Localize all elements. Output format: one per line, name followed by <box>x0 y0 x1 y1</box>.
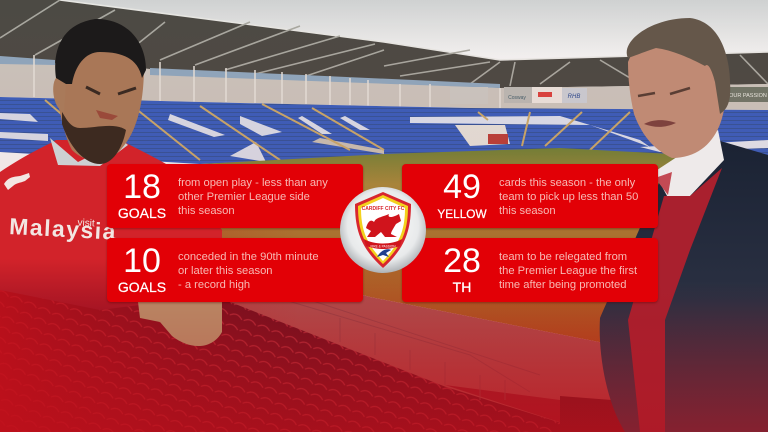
right manager <box>600 18 768 432</box>
number: 49 <box>443 168 481 206</box>
shirt logo: puma cat <box>4 173 30 190</box>
description: this season <box>499 205 556 217</box>
description: conceded in the 90th minute <box>178 251 319 263</box>
panel: 28th <box>402 238 658 302</box>
description: the Premier League the first <box>499 265 637 277</box>
shirt text: visit Malaysia: visit <box>77 218 95 229</box>
number: 28 <box>443 242 481 280</box>
description: cards this season - the only <box>499 177 635 189</box>
label: TH <box>453 279 471 295</box>
background: stadium photo scene with red fade: Cosway <box>508 95 526 101</box>
description: team to be relegated from <box>499 251 627 263</box>
icon: Cardiff City FC crest: CARDIFF CITY FC <box>362 206 405 212</box>
label: YELLOW <box>437 207 487 221</box>
background: stadium photo scene with red fade: OUR PASSION <box>729 93 767 99</box>
icon: Cardiff City FC crest: EST 1899 <box>375 240 391 244</box>
number: 10 <box>123 242 161 280</box>
description: - a record high <box>178 279 250 291</box>
label: GOALS <box>118 205 166 221</box>
left player <box>0 19 222 346</box>
concourse wall <box>0 60 768 110</box>
background: stadium photo scene with red fade: RHB <box>568 94 580 100</box>
face <box>628 32 727 158</box>
description <box>178 251 319 291</box>
panel: 49 yellow <box>402 164 658 228</box>
description <box>499 251 638 291</box>
panel: 18 goals <box>107 164 363 228</box>
label: GOALS <box>118 279 166 295</box>
icon: Cardiff City FC crest: FIRE & PASSION <box>370 244 396 248</box>
number: 18 <box>123 168 161 206</box>
description <box>178 177 328 217</box>
roof <box>0 0 768 88</box>
description: other Premier League side <box>178 191 310 203</box>
description: team to pick up less than 50 <box>499 191 638 203</box>
description: from open play - less than any <box>178 177 328 189</box>
pitch <box>200 148 690 350</box>
description <box>499 177 638 217</box>
advertising boards <box>450 87 488 104</box>
description: or later this season <box>178 265 273 277</box>
shirt text: visit Malaysia: Malaysia <box>9 213 118 245</box>
panel: 10 goals <box>107 238 363 302</box>
description: time after being promoted <box>499 279 626 291</box>
icon: Cardiff City FC crest <box>340 187 426 273</box>
face <box>56 38 144 161</box>
seats foreground <box>0 250 590 432</box>
description: this season <box>178 205 235 217</box>
seats <box>0 97 768 164</box>
